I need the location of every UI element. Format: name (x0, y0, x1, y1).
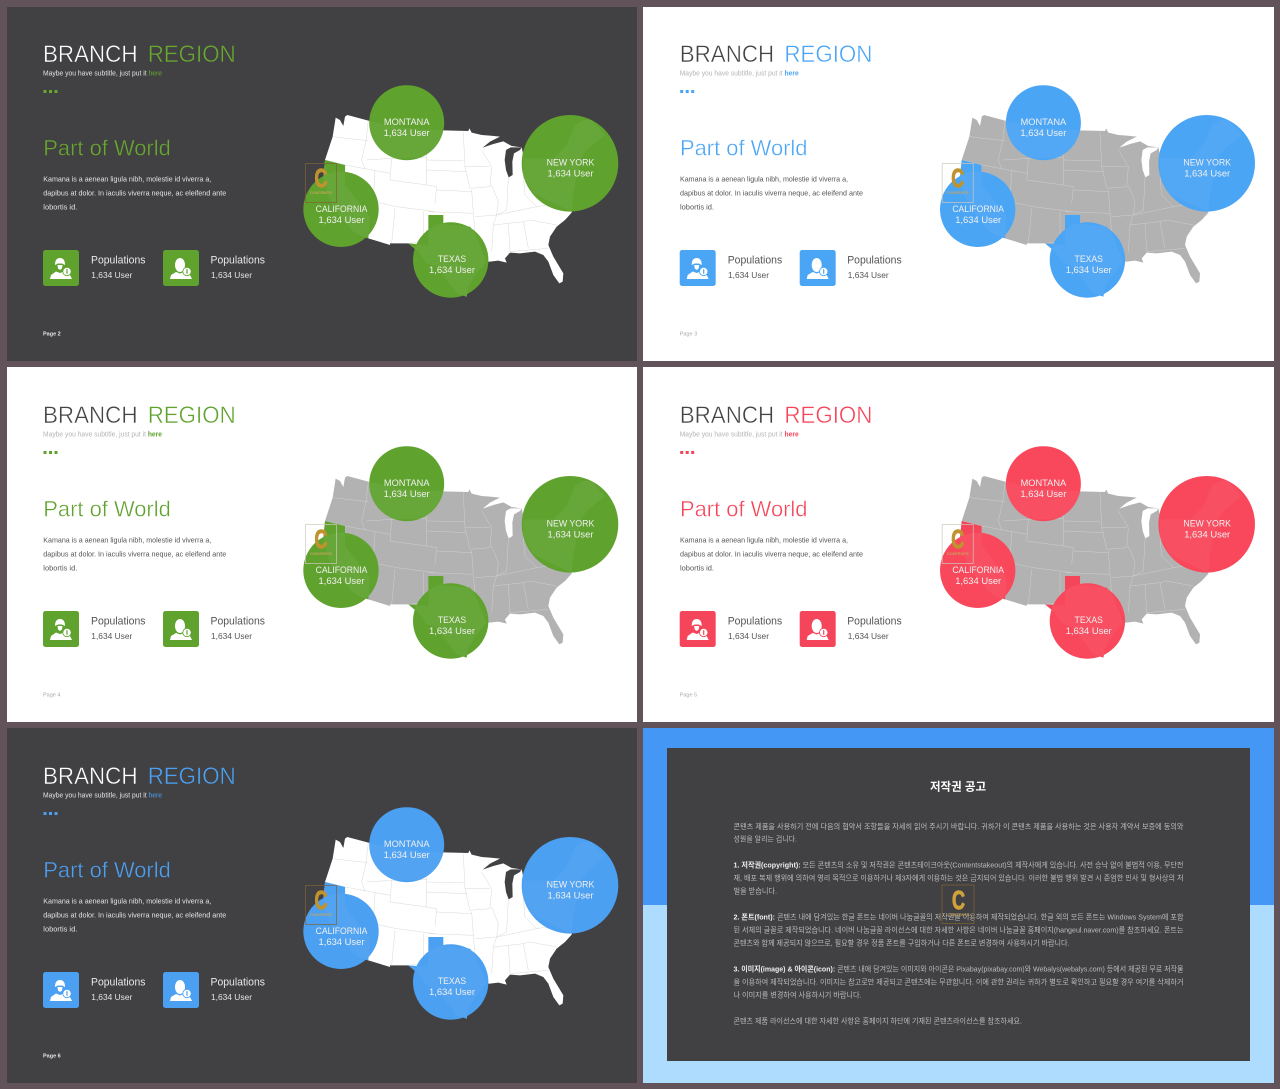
body text (680, 175, 863, 211)
stat: populations 2 (800, 611, 902, 647)
circle: Texas: 1,634 User (429, 265, 475, 275)
circle: New York: 1,634 User (1184, 530, 1230, 540)
stat: populations 2: 1,634 User (211, 631, 252, 641)
circle: Texas: 1,634 User (1066, 265, 1112, 275)
circle: Texas: TEXAS (1075, 254, 1103, 264)
stat: populations 1: Populations (91, 976, 146, 988)
circle: California: CALIFORNIA (316, 926, 368, 936)
circle: New York (522, 837, 618, 934)
circle: California: 1,634 User (318, 937, 364, 947)
panel: slide 3 white green (7, 367, 637, 722)
notice body text: 1. 저작권(copyright): 모든 콘텐츠의 소유 및 저작권은 콘텐츠테이크아웃(Contentstakeout)의 제작사에게 있습니다. 사전 승낙 없이 불법적 이용, 무단전 (734, 860, 1184, 870)
circle: New York (1158, 115, 1255, 212)
page number: Page 6 (43, 1054, 61, 1060)
watermark logo (942, 885, 974, 924)
body text: dapibus at dolor. In iaculis viverra neque, ac eleifend ante (43, 189, 226, 198)
circle: New York: 1,634 User (548, 891, 594, 901)
notice body text: 콘텐츠 제품 라이선스에 대한 자세한 사항은 홈페이지 하단에 기재된 콘텐츠라이선스를 참조하세요. (734, 1015, 1022, 1025)
heading: part of world: Part of World (43, 496, 171, 522)
three dots (44, 812, 58, 815)
circle: New York (522, 115, 618, 212)
title: branch region: BRANCH (680, 41, 774, 68)
circle: New York: 1,634 User (548, 169, 594, 179)
title: branch region (680, 402, 872, 429)
map of the United States (323, 837, 605, 1019)
body text: lobortis id. (680, 202, 714, 211)
notice body text: 을 이용하여 제작되었습니다. 이미지는 참고로만 제공되고 콘텐츠에는 무관합니다. 이에 관한 권리는 귀하가 별도로 확인하고 필요할 경우 여기를 삭제하거 (734, 976, 1184, 986)
stat: populations 2 (800, 250, 902, 286)
circle: California: CALIFORNIA (316, 565, 368, 575)
heading: part of world: Part of World (680, 496, 808, 522)
title: branch region: BRANCH (680, 402, 774, 429)
circle: Montana: MONTANA (384, 117, 430, 127)
notice body text: 재, 배포 복제 행위에 의하여 영리 목적으로 이용하거나 제3자에게 이용하는 것은 금지되어 있습니다. 이러한 불법 행위 발견 시 준엄한 민사 및 형사상의 처 (734, 872, 1184, 882)
circle: Texas: TEXAS (438, 615, 466, 625)
stat: populations 1: 1,634 User (91, 270, 132, 280)
circle: New York: NEW YORK (547, 157, 595, 167)
watermark logo (306, 524, 336, 564)
stat: populations 2: 1,634 User (848, 631, 889, 641)
stat: populations 1: 1,634 User (91, 631, 132, 641)
circle: California (940, 532, 1016, 608)
three dots (44, 90, 58, 93)
heading: copyright notice: 저작권 공고 (930, 780, 986, 794)
circle: Texas (1050, 583, 1126, 659)
page number: Page 3 (680, 332, 697, 338)
circle: Montana: MONTANA (384, 839, 430, 849)
notice body text: 벌을 받습니다. (734, 886, 777, 896)
heading: part of world: Part of World (680, 136, 808, 160)
body text (43, 175, 226, 211)
body text (43, 536, 226, 572)
page number: Page 2 (43, 332, 61, 338)
circle: Texas: 1,634 User (429, 987, 475, 997)
circle: California: 1,634 User (318, 576, 364, 586)
heading: part of world: Part of World (43, 136, 171, 160)
panel: slide 4 white red (643, 367, 1274, 722)
circle: New York (1158, 476, 1255, 573)
three dots (680, 90, 694, 93)
stat: populations 2 (163, 250, 265, 286)
notice body text: 2. 폰트(font): 콘텐츠 내에 담겨있는 한글 폰트는 네이버 나눔글꼴의 저작권을 이용하여 제작되었습니다. 한글 외의 모든 폰트는 Windows System에 포함 (734, 912, 1184, 922)
title: branch region: BRANCH (43, 41, 138, 68)
circle: Texas (413, 583, 488, 659)
subtitle: Maybe you have subtitle, just put it here (43, 432, 162, 438)
circle: California (940, 172, 1016, 247)
body text: Kamana is a aenean ligula nibh, molestie id viverra a, (43, 175, 211, 184)
circle: Montana: MONTANA (384, 478, 430, 488)
stat: populations 2: 1,634 User (848, 270, 889, 280)
circle: Montana (998, 85, 1081, 160)
circle: Texas: 1,634 User (1066, 626, 1112, 636)
watermark logo (306, 885, 336, 924)
watermark logo: CONTENTS (948, 912, 970, 917)
stat: populations 1: Populations (91, 615, 146, 627)
stat: populations 1 (680, 250, 783, 286)
watermark logo: C (952, 885, 965, 915)
circle: Texas (413, 222, 488, 298)
title: branch region: REGION (148, 41, 236, 68)
body text: dapibus at dolor. In iaculis viverra neque, ac eleifend ante (680, 189, 863, 198)
circle: California (303, 894, 379, 969)
circle: California: 1,634 User (955, 215, 1001, 225)
body text: dapibus at dolor. In iaculis viverra neque, ac eleifend ante (43, 911, 226, 920)
stat: populations 1: Populations (91, 254, 146, 266)
page number: Page 4 (43, 692, 60, 698)
watermark logo (942, 163, 973, 202)
body text (680, 536, 863, 572)
title: branch region (43, 402, 236, 429)
circle: Montana: 1,634 User (1020, 489, 1066, 499)
circle: Montana: 1,634 User (1020, 128, 1066, 138)
stat: populations 1: Populations (728, 615, 783, 627)
circle: New York (522, 476, 618, 573)
notice body text: 콘텐츠 제품을 사용하기 전에 다음의 협약서 조항들을 자세히 읽어 주시기 바랍니다. 귀하가 이 콘텐츠 제품을 사용하는 것은 사용자 계약서 보증에 동의와 (734, 821, 1184, 831)
circle: Montana (998, 446, 1081, 521)
circle: Texas (413, 944, 488, 1020)
circle: Montana: 1,634 User (384, 128, 430, 138)
circle: California: CALIFORNIA (952, 204, 1005, 214)
circle: New York: 1,634 User (548, 530, 594, 540)
circle: Texas: 1,634 User (429, 626, 475, 636)
circle: New York: NEW YORK (1183, 518, 1232, 528)
body text: lobortis id. (43, 563, 77, 572)
circle: California (303, 532, 379, 608)
stat: populations 2: 1,634 User (211, 270, 252, 280)
title: branch region (43, 763, 236, 790)
circle: Montana (362, 446, 444, 521)
stat: populations 2 (163, 611, 265, 647)
body text: Kamana is a aenean ligula nibh, molestie id viverra a, (680, 175, 848, 184)
stat: populations 2: Populations (210, 976, 265, 988)
stat: populations 2 (163, 972, 265, 1008)
circle: California (303, 172, 379, 247)
body text: lobortis id. (680, 563, 714, 572)
panel: slide 2 white blue (643, 7, 1274, 361)
map of the United States (323, 476, 605, 658)
circle: Texas: TEXAS (1075, 615, 1103, 625)
circle: California: 1,634 User (318, 215, 364, 225)
heading: part of world: Part of World (43, 858, 171, 882)
circle: Texas: TEXAS (438, 254, 466, 264)
body text: Kamana is a aenean ligula nibh, molestie id viverra a, (680, 536, 848, 545)
panel: copyright notice slide (643, 728, 1274, 1083)
body text: dapibus at dolor. In iaculis viverra neque, ac eleifend ante (680, 550, 863, 559)
circle: California: CALIFORNIA (952, 565, 1005, 575)
notice body text: 성원을 알리는 겁니다. (734, 834, 797, 844)
body text (43, 897, 226, 933)
page number: Page 5 (680, 692, 697, 698)
stat: populations 1: 1,634 User (728, 631, 769, 641)
circle: Montana (362, 807, 444, 882)
stat: populations 1: Populations (728, 254, 783, 266)
title: branch region (43, 41, 236, 68)
title: branch region: REGION (148, 763, 236, 790)
watermark logo (942, 524, 973, 564)
title: branch region: REGION (148, 402, 236, 429)
circle: California: 1,634 User (955, 576, 1001, 586)
subtitle: Maybe you have subtitle, just put it here (680, 432, 799, 438)
notice body text: 된 서체의 글꼴로 제작되었습니다. 네이버 나눔글꼴 라이선스에 대한 자세한 사항은 네이버 나눔글꼴 홈페이지(hangeul.naver.com)를 참조하세요. 폰트는 (734, 924, 1184, 934)
circle: New York: NEW YORK (547, 879, 595, 889)
subtitle: Maybe you have subtitle, just put it here (680, 70, 799, 78)
panel: slide 5 dark blue (7, 728, 637, 1083)
stat: populations 1: 1,634 User (728, 270, 769, 280)
circle: Montana: 1,634 User (384, 489, 430, 499)
circle: Texas (1050, 222, 1126, 298)
body text: Kamana is a aenean ligula nibh, molestie id viverra a, (43, 536, 211, 545)
circle: Montana: MONTANA (1021, 478, 1067, 488)
body text: lobortis id. (43, 924, 77, 933)
map of the United States (960, 476, 1242, 658)
stat: populations 2: Populations (210, 615, 265, 627)
title: branch region: REGION (784, 402, 872, 429)
stat: populations 2: 1,634 User (211, 992, 252, 1002)
stat: populations 2: Populations (847, 615, 902, 627)
map of the United States (960, 115, 1242, 297)
title: branch region: BRANCH (43, 402, 138, 429)
body text: dapibus at dolor. In iaculis viverra neque, ac eleifend ante (43, 550, 226, 559)
stat: populations 1 (43, 250, 146, 286)
stat: populations 2: Populations (847, 254, 902, 266)
three dots (680, 451, 694, 454)
circle: Montana (362, 85, 444, 160)
body text: Kamana is a aenean ligula nibh, molestie id viverra a, (43, 897, 211, 906)
stat: populations 1 (43, 972, 146, 1008)
circle: California: CALIFORNIA (316, 204, 368, 214)
stat: populations 1 (43, 611, 146, 647)
stat: populations 2: Populations (210, 254, 265, 266)
circle: Texas: TEXAS (438, 976, 466, 986)
watermark logo (306, 163, 336, 202)
title: branch region: BRANCH (43, 763, 138, 790)
circle: New York: NEW YORK (1183, 157, 1232, 167)
title: branch region: REGION (784, 41, 872, 68)
subtitle: Maybe you have subtitle, just put it here (43, 70, 162, 78)
panel: slide 1 dark green (7, 7, 637, 361)
circle: New York: NEW YORK (547, 518, 595, 528)
circle: New York: 1,634 User (1184, 169, 1230, 179)
stat: populations 1 (680, 611, 783, 647)
title: branch region (680, 41, 872, 68)
notice body text: 3. 이미지(image) & 아이콘(icon): 콘텐츠 내에 담겨있는 이미지와 아이콘은 Pixabay(pixabay.com)와 Webalys(webalys.com) 등에서 제공된 무료 저작물 (734, 963, 1184, 973)
subtitle: Maybe you have subtitle, just put it here (43, 792, 162, 800)
notice body text: 나 이미지를 변경하여 사용하시기 바랍니다. (734, 989, 862, 999)
stat: populations 1: 1,634 User (91, 992, 132, 1002)
circle: Montana: 1,634 User (384, 850, 430, 860)
body text: lobortis id. (43, 202, 77, 211)
three dots (44, 451, 58, 454)
notice body text: 콘텐츠와 함께 제공되지 않으므로, 필요할 경우 정품 폰트를 구입하거나 다른 폰트로 변경하여 사용하시기 바랍니다. (734, 937, 1070, 947)
notice body text (734, 821, 1184, 1025)
circle: Montana: MONTANA (1021, 117, 1067, 127)
map of the United States (323, 115, 605, 297)
